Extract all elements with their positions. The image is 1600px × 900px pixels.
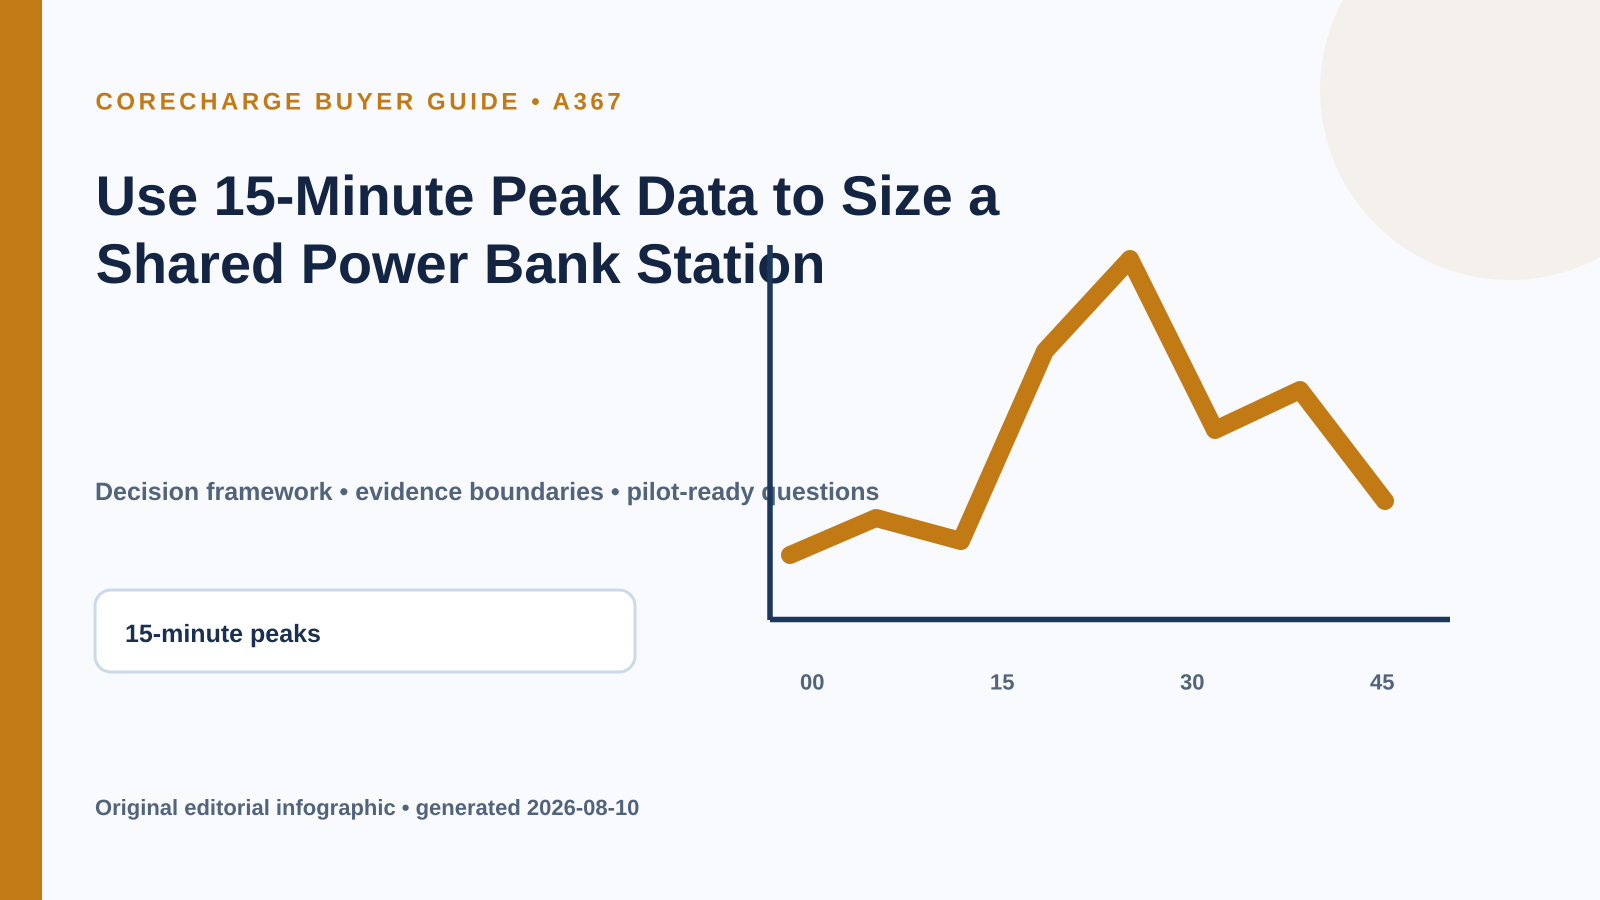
eyebrow: CORECHARGE BUYER GUIDE • A367 bbox=[96, 88, 624, 116]
x-axis labels: 00 bbox=[800, 670, 824, 694]
x-axis labels: 45 bbox=[1370, 670, 1394, 694]
title: Use 15-Minute Peak Data to Size a bbox=[96, 164, 1000, 227]
title bbox=[96, 164, 1000, 295]
chart axes bbox=[770, 245, 1450, 620]
x-axis labels bbox=[800, 670, 1394, 694]
line chart bbox=[770, 245, 1450, 694]
peak data line bbox=[790, 259, 1385, 555]
badge: 15-minute peaks bbox=[125, 620, 321, 648]
decorative circle bbox=[1320, 0, 1600, 280]
x-axis labels: 30 bbox=[1180, 670, 1204, 694]
x-axis labels: 15 bbox=[990, 670, 1014, 694]
accent sidebar bbox=[0, 0, 42, 900]
badge bbox=[95, 590, 635, 672]
subtitle: Decision framework • evidence boundaries • pilot-ready questions bbox=[95, 478, 879, 506]
footer note: Original editorial infographic • generated 2026-08-10 bbox=[95, 795, 639, 820]
title: Shared Power Bank Station bbox=[96, 232, 825, 295]
